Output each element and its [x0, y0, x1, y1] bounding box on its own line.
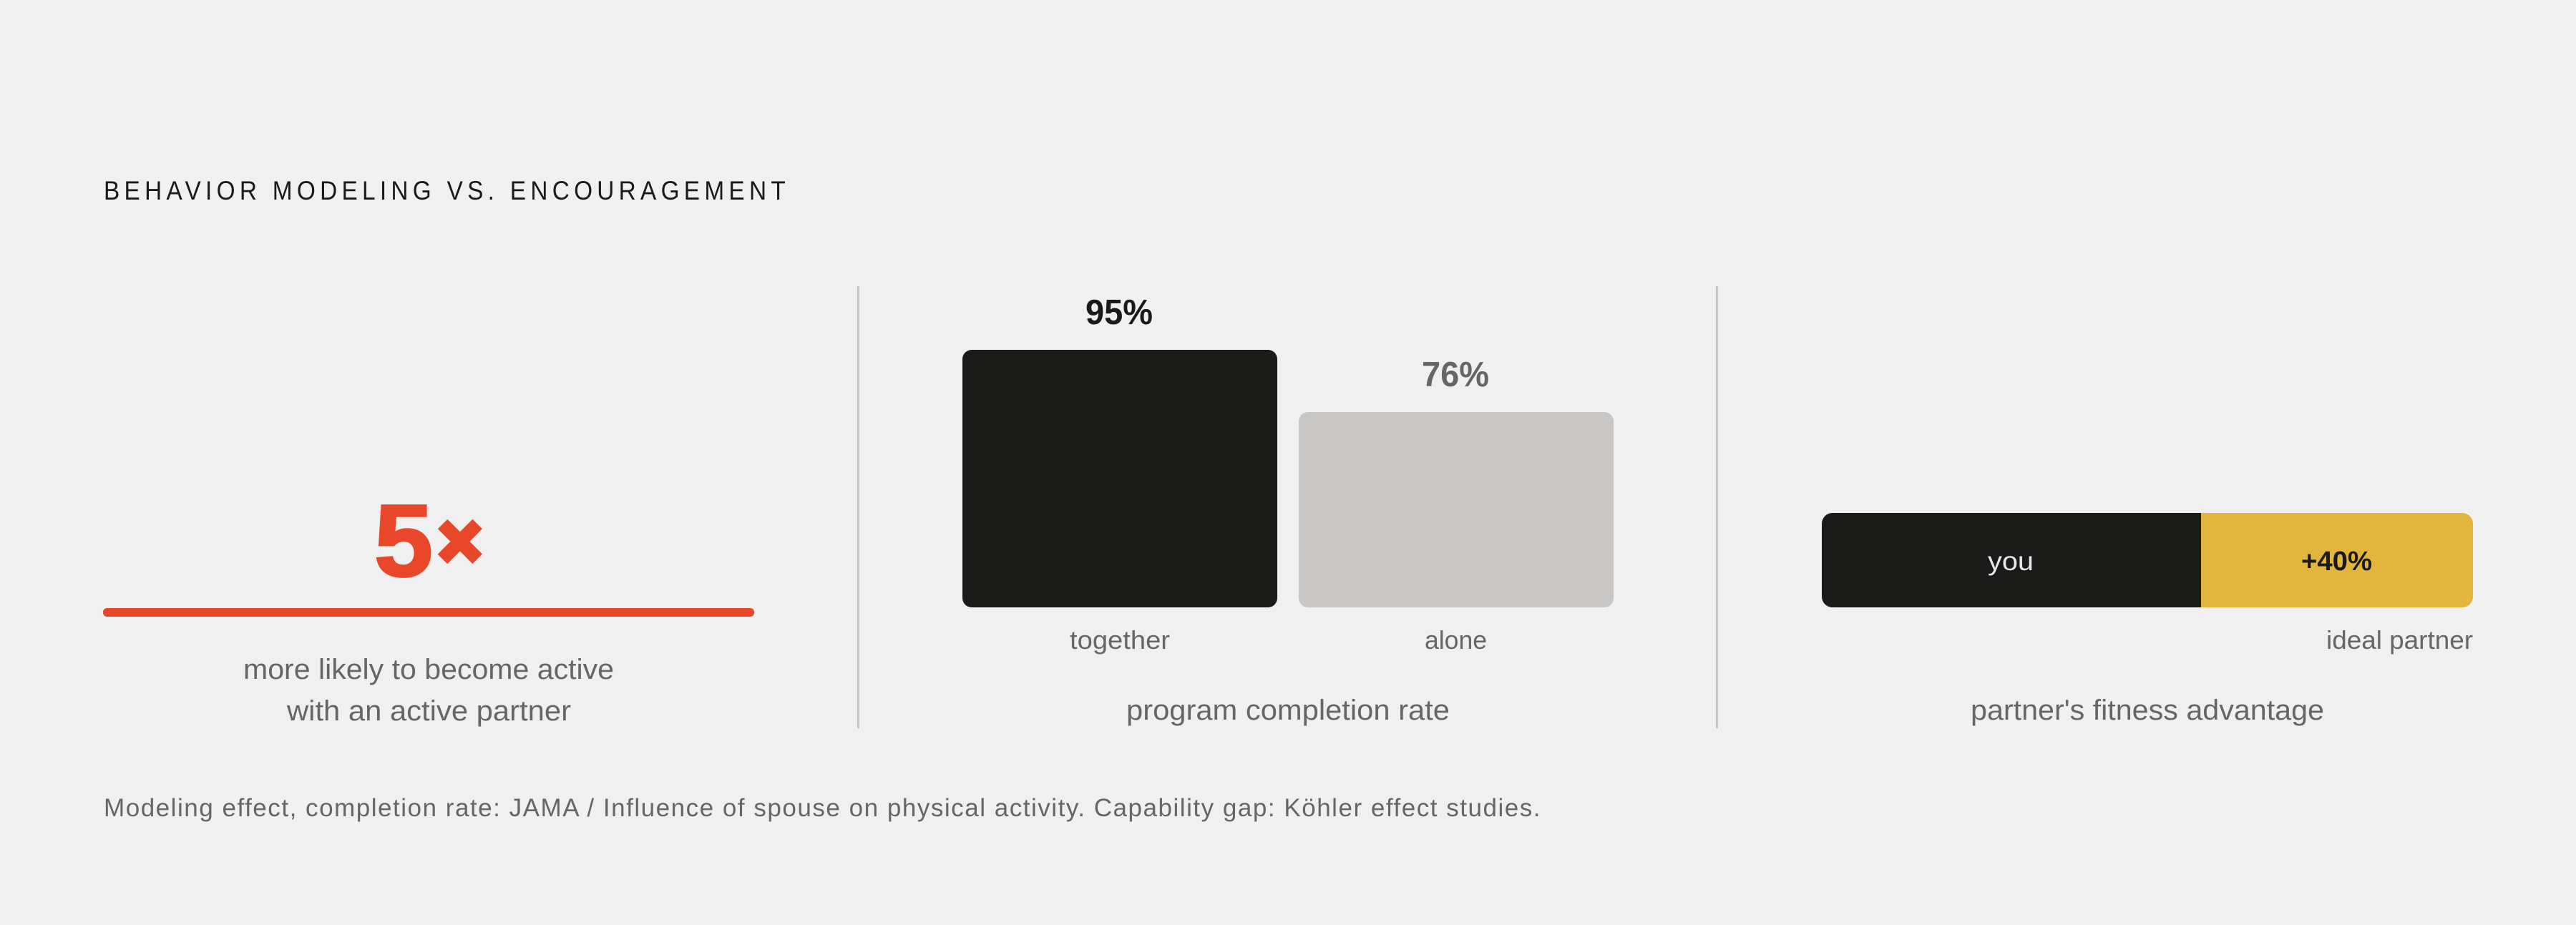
panel: 5x modeling effect: [103, 484, 754, 727]
label: ideal partner: ideal partner: [2326, 625, 2473, 655]
panel: completion rate chart: [962, 293, 1614, 726]
caption: partner's fitness advantage: partner's fitness advantage: [1971, 695, 2324, 726]
red rule: [103, 608, 754, 617]
panel: fitness advantage: [1822, 513, 2473, 726]
big stat: 5x: 5: [374, 484, 433, 598]
label: +40%: +40%: [2301, 547, 2372, 577]
title: BEHAVIOR MODELING VS. ENCOURAGEMENT: [104, 176, 790, 205]
big stat: 5x: ×: [439, 500, 482, 582]
bar: alone: alone: [1425, 625, 1487, 655]
bar: together: 95%: [1085, 293, 1153, 332]
bar: together: [962, 293, 1277, 655]
segment: +40%: [2201, 513, 2473, 607]
caption: program completion rate: program completion rate: [1126, 695, 1450, 726]
source note: Modeling effect, completion rate: JAMA / Influence of spouse on physical activity. Capability gap: Köhler effect studies.: [104, 794, 1541, 822]
segment: you: [1822, 513, 2201, 607]
caption: more likely: with an active partner: [286, 695, 571, 727]
label: you: you: [1988, 547, 2034, 576]
stacked bar: [1822, 513, 2473, 607]
bar: alone: 76%: [1422, 356, 1489, 394]
bar: alone: [1299, 356, 1614, 655]
caption: more likely: [243, 654, 614, 727]
divider right: [1716, 286, 1718, 728]
divider left: [857, 286, 859, 728]
bar: together: together: [1070, 625, 1170, 655]
caption: more likely: more likely to become active: [243, 654, 614, 685]
big stat: 5x: [374, 484, 482, 598]
